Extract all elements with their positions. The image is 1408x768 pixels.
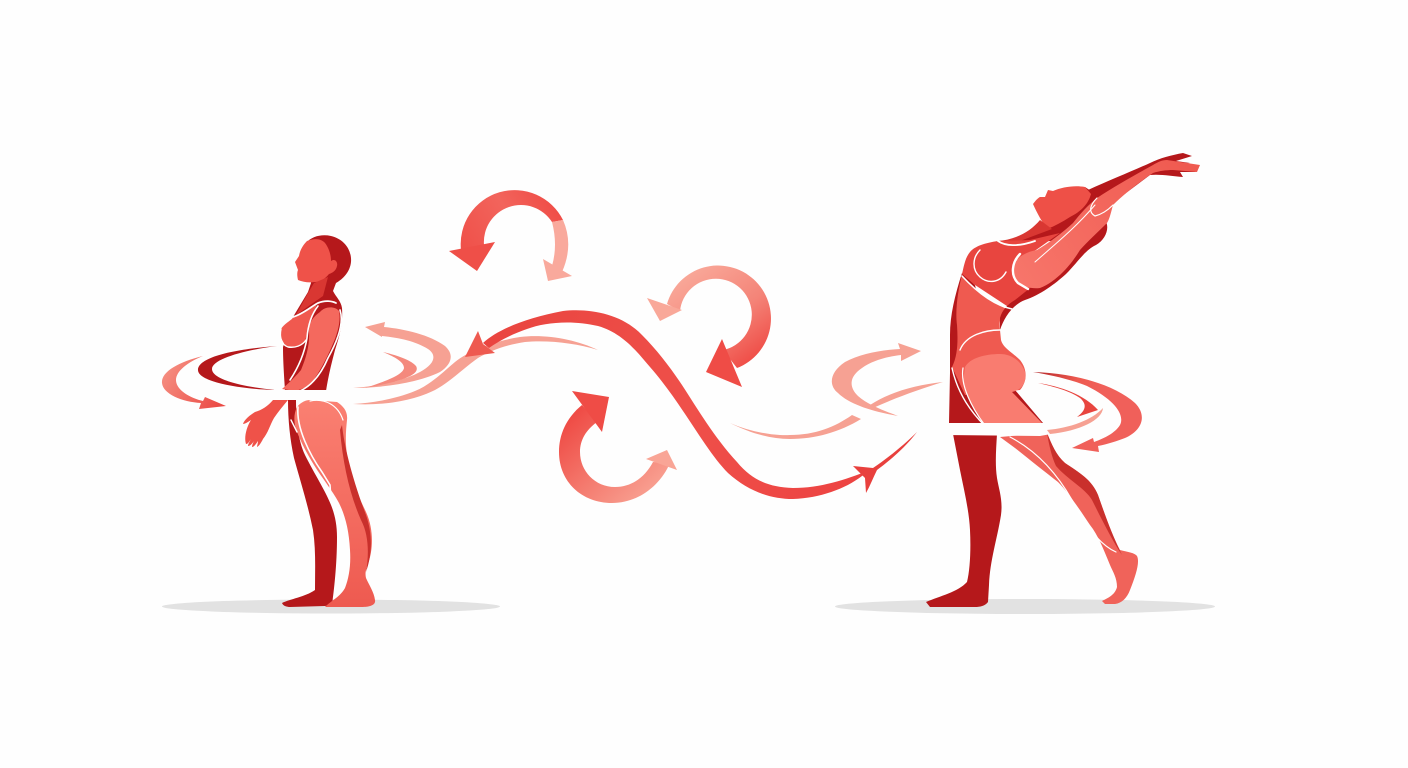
white waist band: right figure	[945, 423, 1062, 436]
medium inner crescent	[365, 352, 417, 388]
pale arrowhead	[647, 298, 682, 321]
arc	[667, 266, 771, 368]
pale wave leading to right figure	[730, 415, 861, 439]
near arm	[1013, 160, 1200, 288]
pale ring segment	[1047, 408, 1103, 434]
inner crescent	[1038, 383, 1098, 417]
far arm	[1088, 153, 1197, 205]
red arrowhead	[449, 242, 495, 271]
front leg	[294, 400, 375, 607]
head and torso silhouette	[283, 235, 351, 391]
forearm and hand	[243, 400, 288, 447]
abdomen	[952, 275, 1026, 395]
chest	[280, 304, 317, 347]
red arc	[461, 190, 563, 250]
front leg dark contour	[1047, 433, 1122, 555]
neck	[296, 277, 328, 315]
ground shadow: right figure	[835, 599, 1215, 614]
pale arrow curling back	[353, 322, 451, 388]
hair and neck shadow	[1005, 187, 1107, 245]
body	[483, 310, 870, 499]
under-arm shadow	[1000, 215, 1107, 330]
white waist band: left figure	[272, 390, 360, 400]
curled arrow	[832, 343, 921, 416]
rear leg	[282, 400, 337, 607]
curved arrow: top	[449, 190, 572, 281]
tapered sliver	[870, 382, 943, 408]
left rotation swirl	[162, 322, 451, 409]
face	[1033, 186, 1091, 229]
leg detail dark line	[340, 425, 371, 572]
curved arrow: right	[647, 266, 771, 387]
dark ring	[198, 346, 277, 390]
extended front leg	[1000, 433, 1138, 604]
red arrowhead	[572, 391, 609, 432]
left arrowhead	[465, 331, 495, 357]
pale arrowhead	[646, 450, 677, 470]
hip and thigh	[963, 354, 1042, 423]
white contour lines	[952, 198, 1116, 552]
arc	[559, 405, 670, 503]
dark torso and hip silhouette	[949, 273, 1043, 423]
right rotation swirl	[1033, 372, 1142, 452]
pale arrowhead	[543, 259, 572, 281]
red arrowhead	[706, 339, 742, 387]
chest	[962, 233, 1060, 308]
pale arrow: left of right figure	[832, 343, 943, 416]
face	[295, 239, 337, 282]
ground shadow: left figure	[162, 600, 500, 614]
right figure: reaching person	[926, 153, 1200, 607]
curved arrow: bottom	[559, 391, 677, 503]
outer arrow	[1033, 372, 1142, 452]
left arrow	[162, 356, 226, 409]
neck	[997, 220, 1052, 244]
upper arm	[282, 307, 340, 391]
pale arc	[552, 220, 568, 272]
left figure: standing person	[243, 235, 375, 607]
right arrowhead	[853, 432, 917, 493]
pale wave trailing from left figure	[353, 336, 598, 404]
rear standing leg	[926, 434, 1002, 607]
main S-curve two-way arrow	[465, 310, 917, 499]
white contour lines	[280, 301, 343, 500]
